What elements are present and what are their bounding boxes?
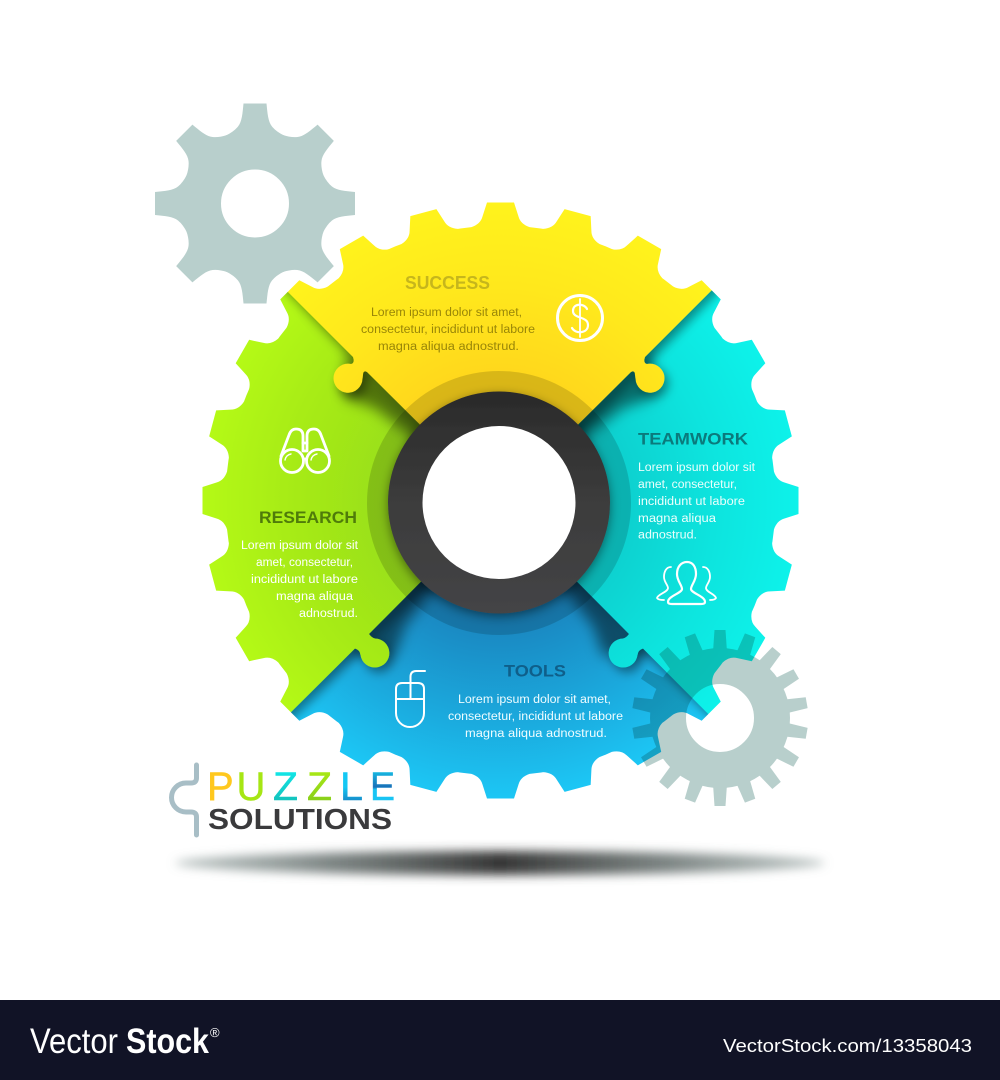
word: puzzle: Z — [273, 765, 298, 809]
text block: teamwork: amet, consectetur, — [638, 479, 737, 491]
text block: tools — [448, 694, 623, 740]
text block: teamwork: Lorem ipsum dolor sit — [638, 462, 756, 474]
icon: mouse — [396, 671, 425, 727]
text block: tools: magna aliqua adnostrud. — [465, 728, 607, 740]
icon: grey gear bottom right overlapping main gear — [632, 630, 808, 806]
icon: small grey gear top left — [155, 104, 355, 304]
text block: teamwork: adnostrud. — [638, 530, 697, 542]
text block: tools: consectetur, incididunt ut labore — [448, 711, 623, 723]
word: puzzle: Z — [307, 765, 332, 809]
footer brand: ® — [210, 1025, 220, 1040]
text block: tools: Lorem ipsum dolor sit amet, — [458, 694, 611, 706]
text block: research: Lorem ipsum dolor sit — [241, 540, 359, 552]
heading: teamwork: TEAMWORK — [638, 430, 749, 448]
darker inner band — [367, 371, 631, 635]
main gear divided into four puzzle pieces — [202, 202, 798, 798]
text block: success: Lorem ipsum dolor sit amet, — [371, 307, 522, 319]
text block: research: magna aliqua — [276, 591, 354, 603]
text block: research — [241, 540, 359, 620]
text block: teamwork: incididunt ut labore — [638, 496, 745, 508]
logo: puzzle solutions — [172, 765, 395, 836]
icon: binoculars — [280, 429, 330, 472]
text block: teamwork — [638, 462, 756, 542]
icon: dollar coin — [558, 296, 602, 340]
icon: puzzle connector — [172, 765, 196, 835]
heading: tools: TOOLS — [504, 662, 566, 680]
word: puzzle: U — [236, 765, 265, 809]
footer bar — [0, 1000, 1000, 1080]
panel: tools (blue piece) — [290, 582, 708, 798]
text block: research: amet, consectetur, — [256, 557, 353, 569]
word: puzzle: E — [370, 765, 395, 809]
footer brand: Stock — [126, 1022, 209, 1061]
panel: success (yellow piece) — [283, 202, 720, 432]
footer brand: Vector — [30, 1022, 118, 1061]
word: solutions: SOLUTIONS — [208, 804, 392, 836]
text block: teamwork: magna aliqua — [638, 513, 717, 525]
word: puzzle: L — [340, 765, 363, 809]
ground shadow — [175, 851, 825, 875]
text block: research: incididunt ut labore — [251, 574, 358, 586]
panel: teamwork (cyan piece) — [576, 290, 798, 719]
heading: success: SUCCESS — [405, 273, 490, 293]
footer url: VectorStock.com/13358043 — [723, 1036, 972, 1056]
word: puzzle: P — [207, 765, 234, 809]
footer brand — [30, 1022, 220, 1061]
text block: research: adnostrud. — [299, 608, 358, 620]
heading: research: RESEARCH — [259, 508, 357, 527]
panel: research (green piece) — [202, 292, 427, 720]
text block: success: consectetur, incididunt ut labore — [361, 324, 535, 336]
text block: success: magna aliqua adnostrud. — [378, 341, 519, 353]
word: puzzle — [207, 765, 395, 809]
text block: success — [361, 307, 535, 353]
black ring with white centre — [388, 392, 610, 614]
icon: people — [657, 562, 716, 604]
